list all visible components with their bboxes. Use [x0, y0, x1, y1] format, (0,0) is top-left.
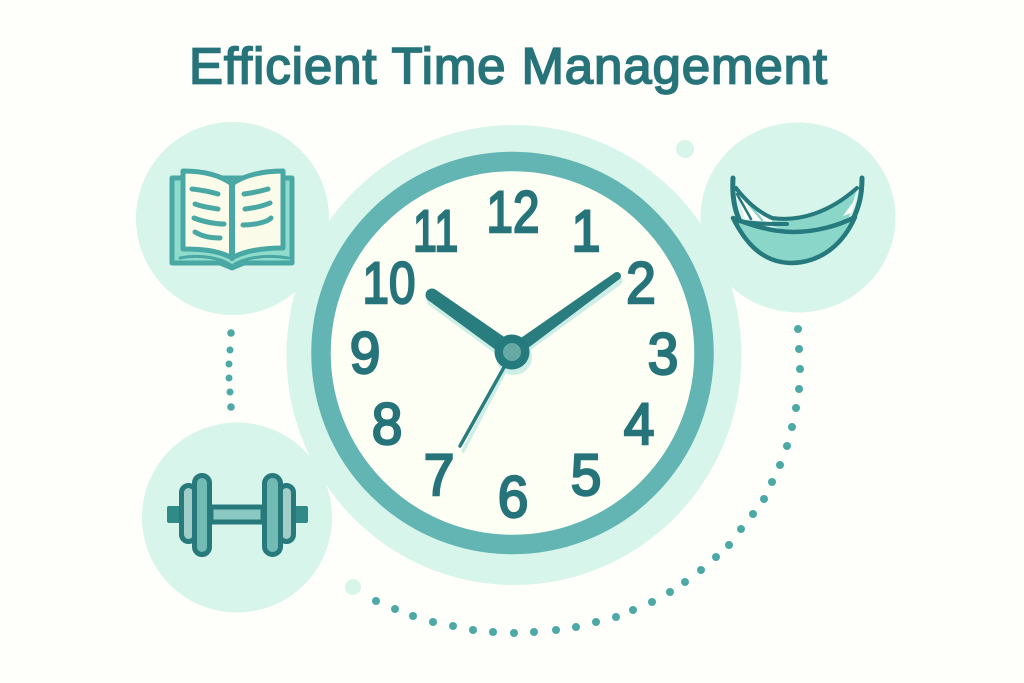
second hand	[460, 353, 512, 446]
clock numbers	[350, 181, 678, 529]
dotted connector: hammock to clock bottom	[372, 325, 804, 637]
panel: book circle	[136, 122, 329, 315]
hammock left gap	[737, 190, 772, 222]
clock numbers: 11	[413, 199, 459, 264]
outer plates	[182, 486, 196, 542]
hour hand	[426, 288, 517, 358]
clock numbers: 6	[498, 465, 528, 529]
panel: dumbbell circle	[142, 422, 332, 612]
clock halo	[286, 125, 742, 585]
clock numbers: 3	[648, 322, 678, 386]
inner plates	[194, 476, 210, 554]
hammock sling	[736, 188, 857, 219]
clock hub	[494, 334, 530, 370]
clock numbers: 10	[363, 252, 415, 316]
bar stubs	[167, 506, 181, 523]
clock numbers: 2	[626, 251, 656, 315]
clock numbers: 12	[487, 181, 539, 245]
clock numbers: 7	[424, 443, 454, 507]
decorative dot: top right	[676, 140, 694, 158]
minute hand	[508, 272, 621, 357]
icon: dumbbell	[167, 476, 308, 554]
hammock posts	[733, 178, 739, 219]
clock hands shadow	[433, 281, 618, 451]
icon: open book	[172, 171, 292, 268]
clock numbers: 1	[571, 198, 601, 264]
icon: hammock	[733, 178, 862, 263]
hammock right band	[772, 188, 857, 232]
bar	[211, 507, 263, 522]
clock numbers: 9	[350, 321, 380, 385]
clock numbers: 8	[372, 392, 402, 456]
book pages	[183, 171, 283, 258]
book text lines	[192, 189, 271, 238]
clock numbers: 5	[571, 443, 601, 507]
hammock body	[733, 217, 855, 263]
clock face and ring	[321, 162, 704, 544]
title: Efficient Time Management	[189, 38, 827, 94]
clock	[321, 162, 704, 544]
panel: hammock circle	[700, 122, 896, 312]
clock numbers: 4	[624, 392, 654, 456]
book cover	[172, 178, 292, 268]
dotted connector: book to dumbbell	[226, 329, 235, 411]
decorative dot: bottom left	[345, 579, 361, 595]
